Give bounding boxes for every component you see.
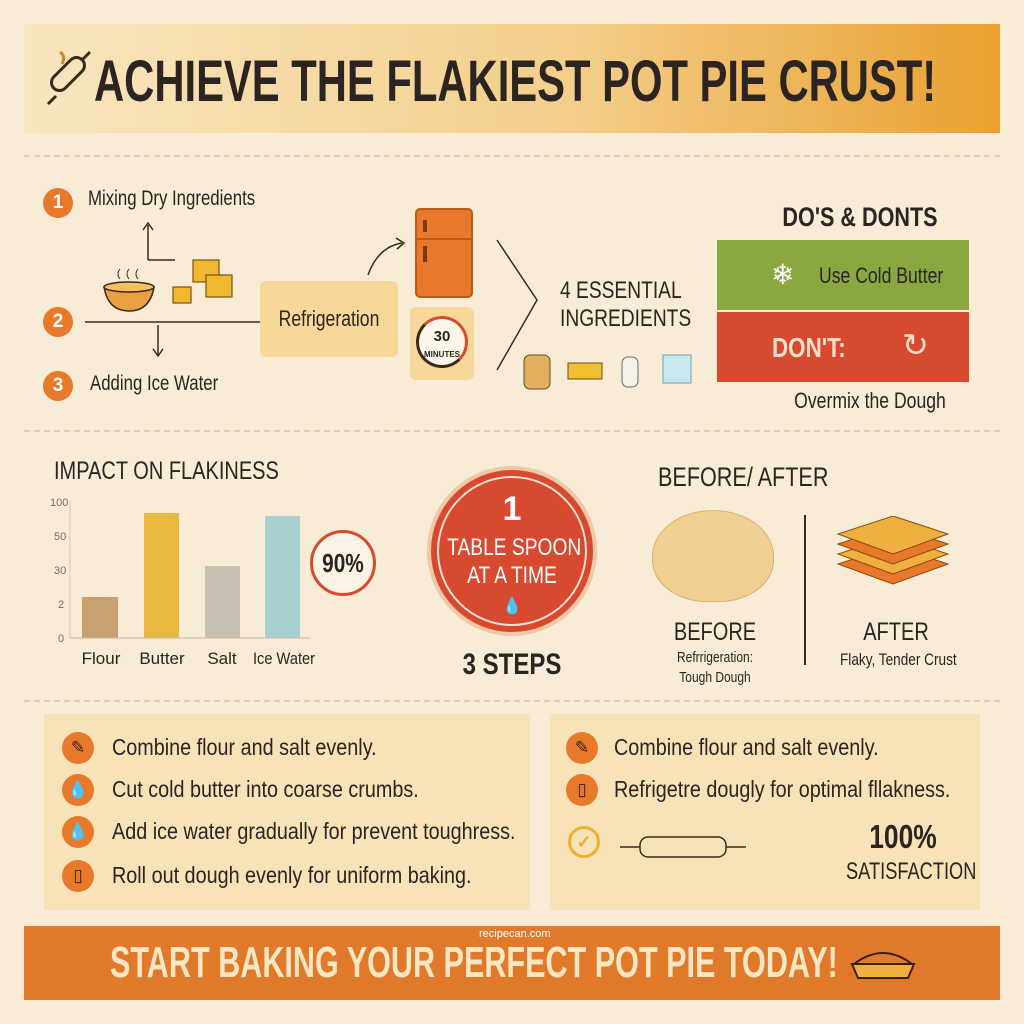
footer banner: recipecan.com (479, 928, 551, 940)
panel: before/after (652, 462, 957, 686)
bar chart: impact on flakiness: 0 (58, 633, 64, 645)
essential ingredients: INGREDIENTS (560, 305, 691, 332)
bar chart: impact on flakiness: Ice Water (253, 649, 315, 668)
panel: process steps (43, 187, 538, 401)
bar chart: impact on flakiness: Salt (207, 649, 237, 668)
3 steps: 3 STEPS (463, 648, 561, 681)
icon: rolling pin (620, 836, 746, 858)
panel: before/after: BEFORE/ AFTER (658, 462, 828, 492)
bar chart: impact on flakiness: IMPACT ON FLAKINESS (54, 457, 279, 485)
icons: flour, butter, salt, ice (524, 354, 692, 390)
bar chart: impact on flakiness (50, 457, 376, 668)
panel: tips left: Cut cold butter into coarse crumbs. (112, 776, 419, 802)
panel: process steps: Adding Ice Water (90, 372, 218, 395)
big red circle: 1 tablespoon (427, 466, 597, 636)
step 1 (43, 188, 73, 218)
panel: tips left (44, 714, 530, 910)
panel: tips right: SATISFACTION (846, 858, 976, 885)
refrigeration box: Refrigeration (279, 306, 379, 331)
icon: check (568, 826, 600, 858)
footer banner: START BAKING YOUR PERFECT POT PIE TODAY! (110, 938, 838, 987)
panel: tips right: ▯ (577, 780, 587, 799)
panel: before/after: Refrrigeration: (677, 649, 753, 666)
title text: ACHIEVE THE FLAKIEST POT PIE CRUST! (94, 49, 936, 114)
title banner (24, 24, 1000, 133)
panel: tips left: 💧 (67, 822, 89, 841)
step 2: 2 (53, 311, 63, 332)
panel: tips left: 💧 (67, 780, 89, 799)
big red circle: 1 tablespoon: 1 (503, 490, 521, 528)
dont box (717, 312, 969, 382)
layered crust (836, 516, 950, 584)
bar chart: impact on flakiness: Flour (82, 649, 121, 668)
icon: fridge (415, 208, 473, 298)
bar chart: impact on flakiness: 2 (58, 599, 64, 611)
panel: tips right: ✎ (575, 738, 589, 757)
do box: ❄ (771, 259, 794, 290)
step 2 (43, 307, 73, 337)
dough ball (652, 510, 774, 602)
big red circle: 1 tablespoon: AT A TIME (467, 562, 557, 589)
bar chart: impact on flakiness: 100 (50, 497, 68, 509)
bar chart: impact on flakiness: 50 (54, 531, 66, 543)
chevron arrow (496, 240, 538, 370)
bar chart: impact on flakiness: 30 (54, 565, 66, 577)
step 3: 3 (53, 375, 63, 396)
icon: pie (850, 952, 916, 979)
refrigeration box (260, 281, 398, 357)
icon: butter cubes (172, 259, 233, 304)
panel: before/after: AFTER (863, 618, 929, 646)
step 3 (43, 371, 73, 401)
bar chart: impact on flakiness: Butter (139, 649, 185, 668)
do box: Use Cold Butter (819, 263, 943, 288)
icon: rolling pin (47, 50, 91, 105)
panel: before/after: Tough Dough (679, 669, 751, 686)
satisfaction stat: 100% (869, 818, 937, 855)
footer banner (24, 926, 1000, 1000)
do box (717, 240, 969, 310)
essential ingredients: 4 ESSENTIAL (560, 277, 682, 304)
panel: before/after: BEFORE (674, 618, 756, 646)
panel: tips left: ▯ (73, 866, 83, 885)
90% badge: 90% (322, 548, 364, 578)
panel: tips left: ✎ (71, 738, 85, 757)
icon: check: ✓ (576, 832, 592, 852)
90% badge (310, 530, 376, 596)
dont box: ↻ (902, 327, 929, 363)
panel: tips left: Roll out dough evenly for uniform baking. (112, 862, 472, 888)
panel: do's and don'ts: Overmix the Dough (794, 388, 946, 413)
dont box: DON'T: (772, 332, 846, 363)
panel: do's and don'ts: DO'S & DONTS (782, 202, 938, 232)
panel: tips right (550, 714, 980, 910)
panel: do's and don'ts (717, 202, 969, 413)
arrows (85, 222, 260, 358)
panel: process steps: Mixing Dry Ingredients (88, 187, 255, 210)
panel: tips right: Combine flour and salt evenly. (614, 734, 879, 760)
panel: tips left: Combine flour and salt evenly. (112, 734, 377, 760)
timer box: 30 (434, 328, 450, 345)
timer box (410, 307, 474, 380)
essential ingredients (524, 277, 692, 390)
icon: bowl (103, 268, 155, 312)
panel: before/after: Flaky, Tender Crust (840, 650, 957, 669)
panel: tips right: Refrigetre dougly for optimal fllakness. (614, 776, 950, 802)
panel: tips left: Add ice water gradually for prevent toughress. (112, 818, 516, 844)
big red circle: 1 tablespoon: TABLE SPOON (447, 534, 581, 561)
step 1: 1 (53, 192, 63, 213)
big red circle: 1 tablespoon: 💧 (502, 598, 522, 615)
timer box: MINUTES (424, 350, 460, 359)
